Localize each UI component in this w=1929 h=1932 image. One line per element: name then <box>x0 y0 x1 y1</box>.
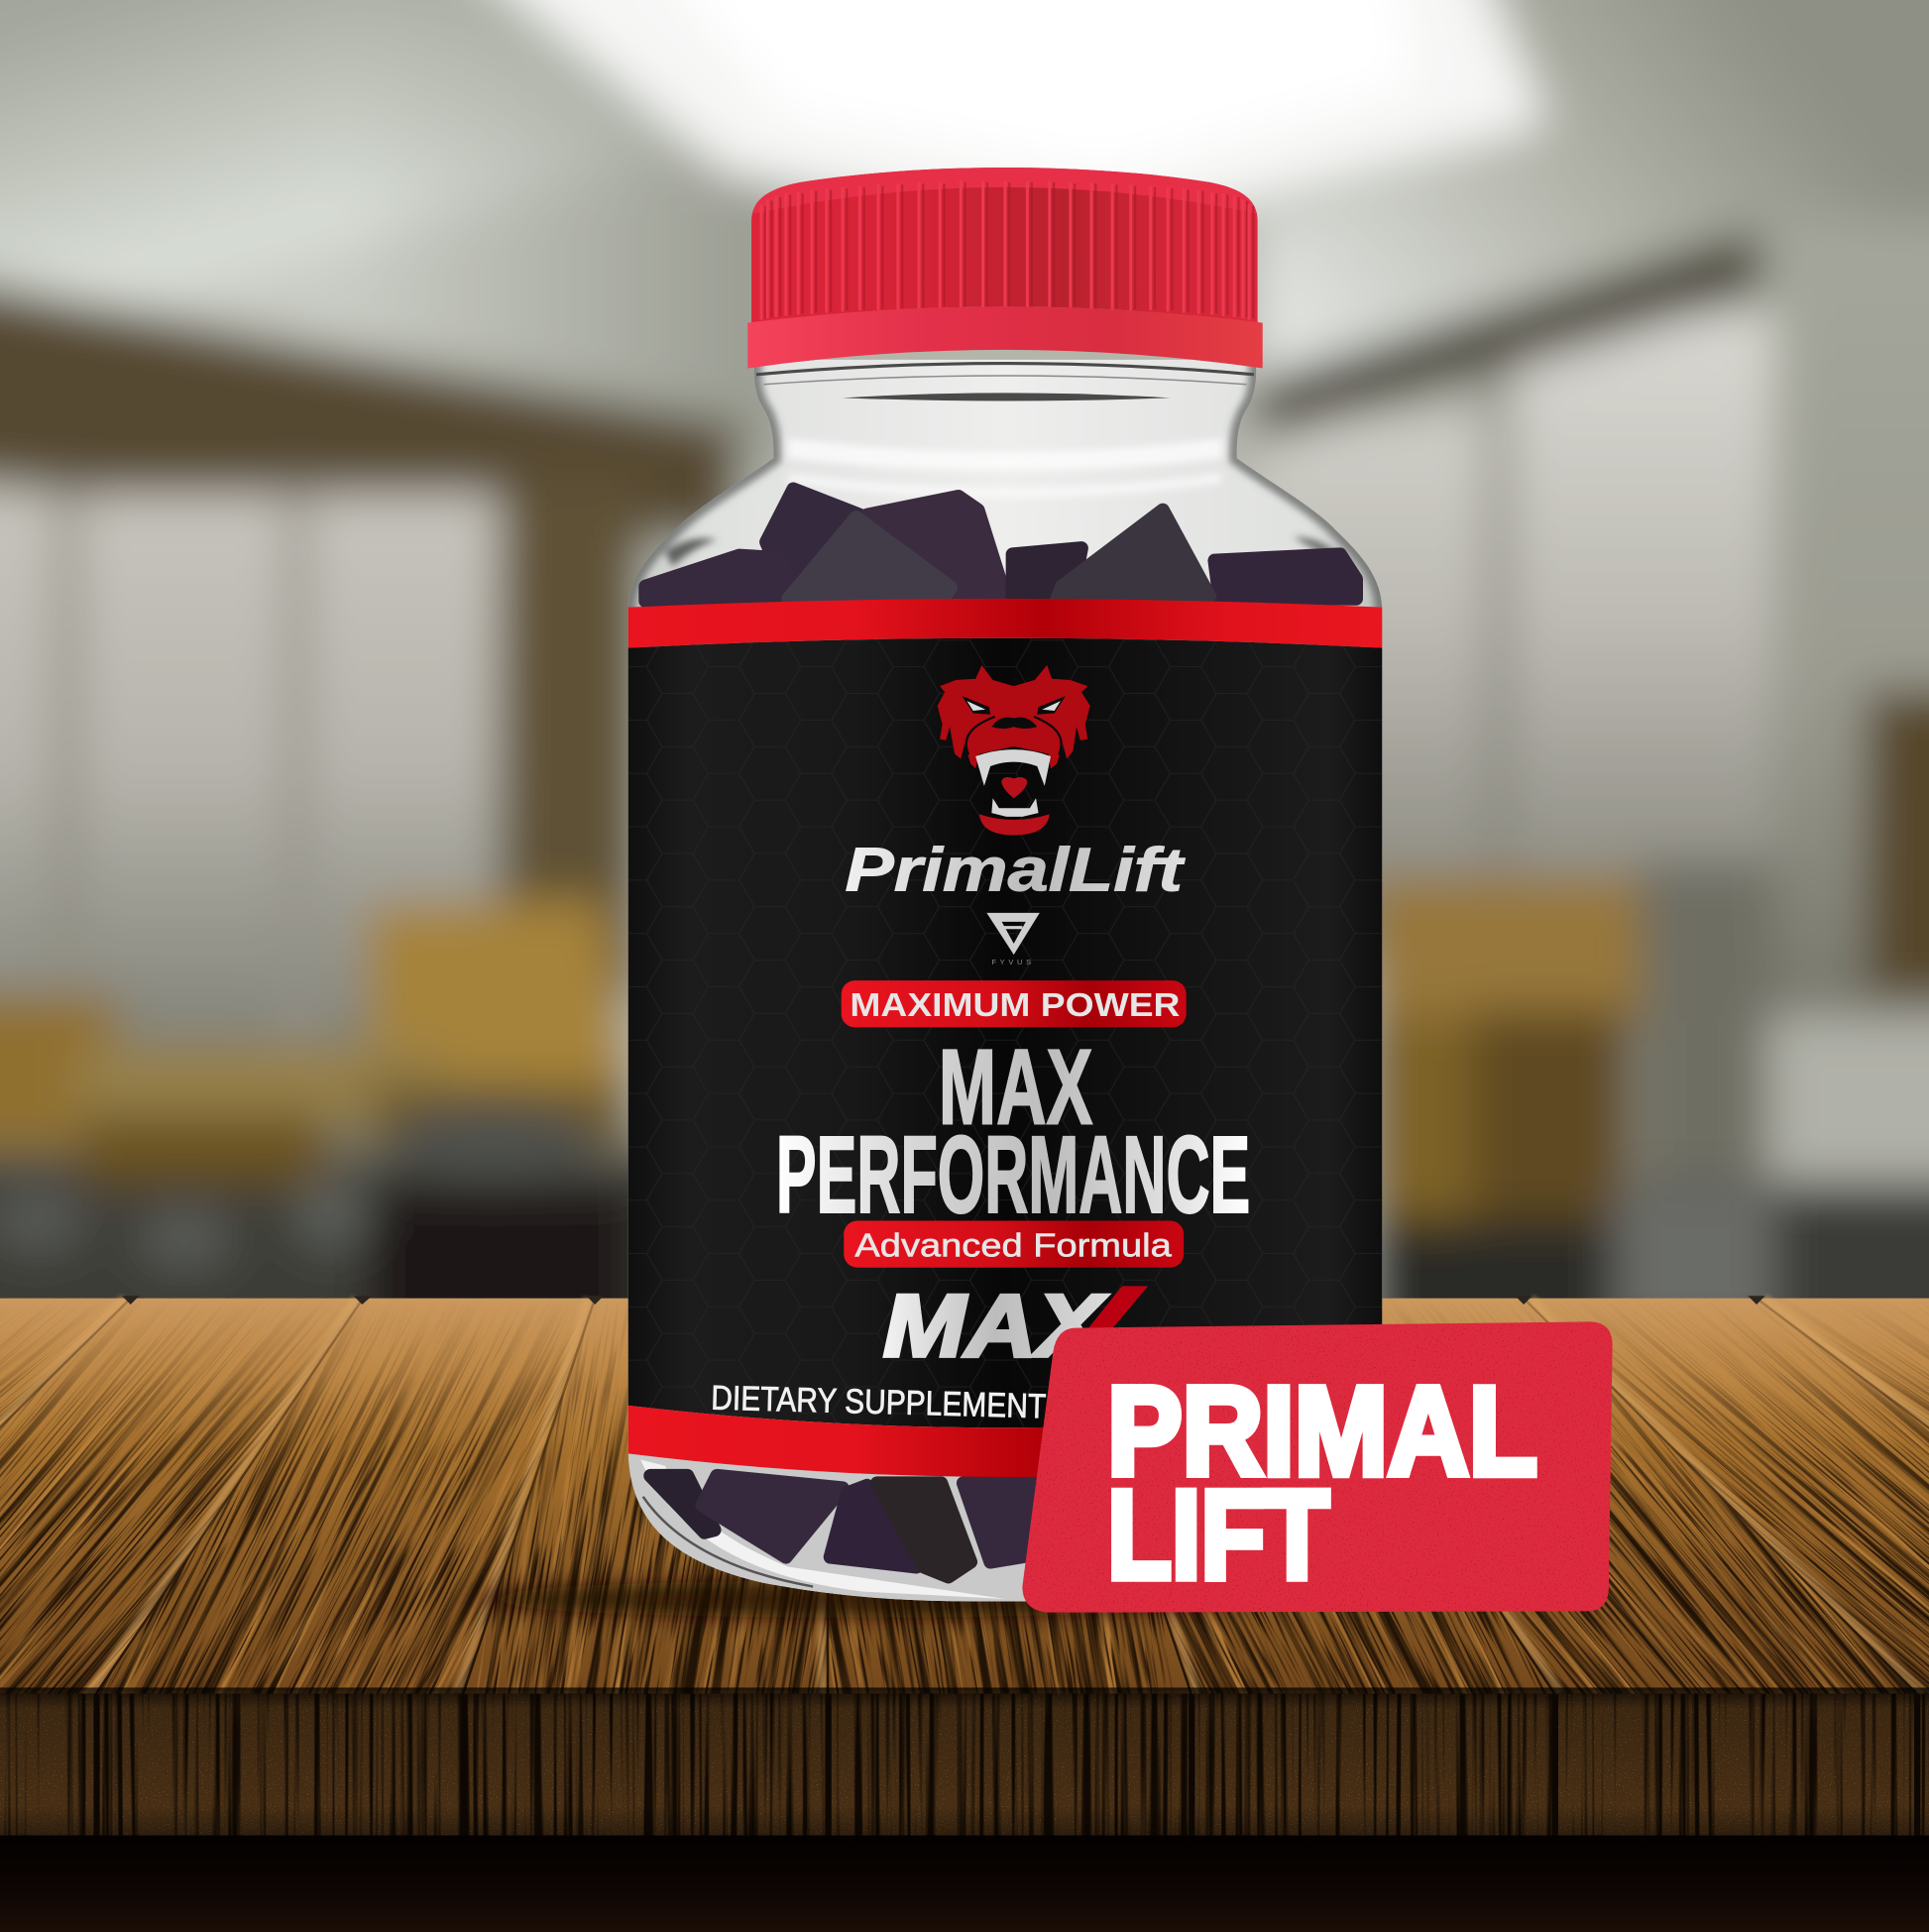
cap knurled body <box>751 168 1258 323</box>
glass reflections <box>628 350 1382 1601</box>
black label <box>628 623 1382 1460</box>
wooden table front edge <box>0 1687 1929 1836</box>
gorilla logo <box>938 665 1090 836</box>
pill: maximum power <box>842 980 1187 1027</box>
cap collar <box>747 306 1263 369</box>
pill: maximum power: MAXIMUM POWER <box>850 986 1181 1023</box>
gummies <box>645 489 1356 1577</box>
red bottom band <box>628 1406 1382 1477</box>
pill: advanced formula <box>844 1220 1184 1268</box>
MAX logo: MAX <box>883 1276 1108 1375</box>
FYVUS logo: FYVUS <box>991 958 1035 966</box>
pill: advanced formula: Advanced Formula <box>854 1228 1172 1265</box>
dietary supplement text: DIETARY SUPPLEMENT <box>711 1380 1047 1425</box>
headline PERFORMANCE: PERFORMANCE <box>776 1114 1250 1236</box>
wooden table top planks <box>0 1296 1929 1694</box>
brand name PrimalLift: PrimalLift <box>845 836 1186 904</box>
red card: PRIMAL LIFT: LIFT <box>1107 1464 1329 1605</box>
red top band <box>628 599 1382 648</box>
bottle shadow on table <box>468 1580 1257 1618</box>
glass body <box>628 360 1382 1601</box>
dark underside of table <box>0 1836 1929 1932</box>
bottle <box>628 148 1382 1601</box>
red card: PRIMAL LIFT: PRIMAL <box>1107 1360 1537 1501</box>
headline MAX: MAX <box>939 1026 1092 1146</box>
FYVUS logo <box>986 913 1040 966</box>
blurred room background <box>0 0 1929 1478</box>
red card: PRIMAL LIFT <box>1016 1318 1620 1620</box>
